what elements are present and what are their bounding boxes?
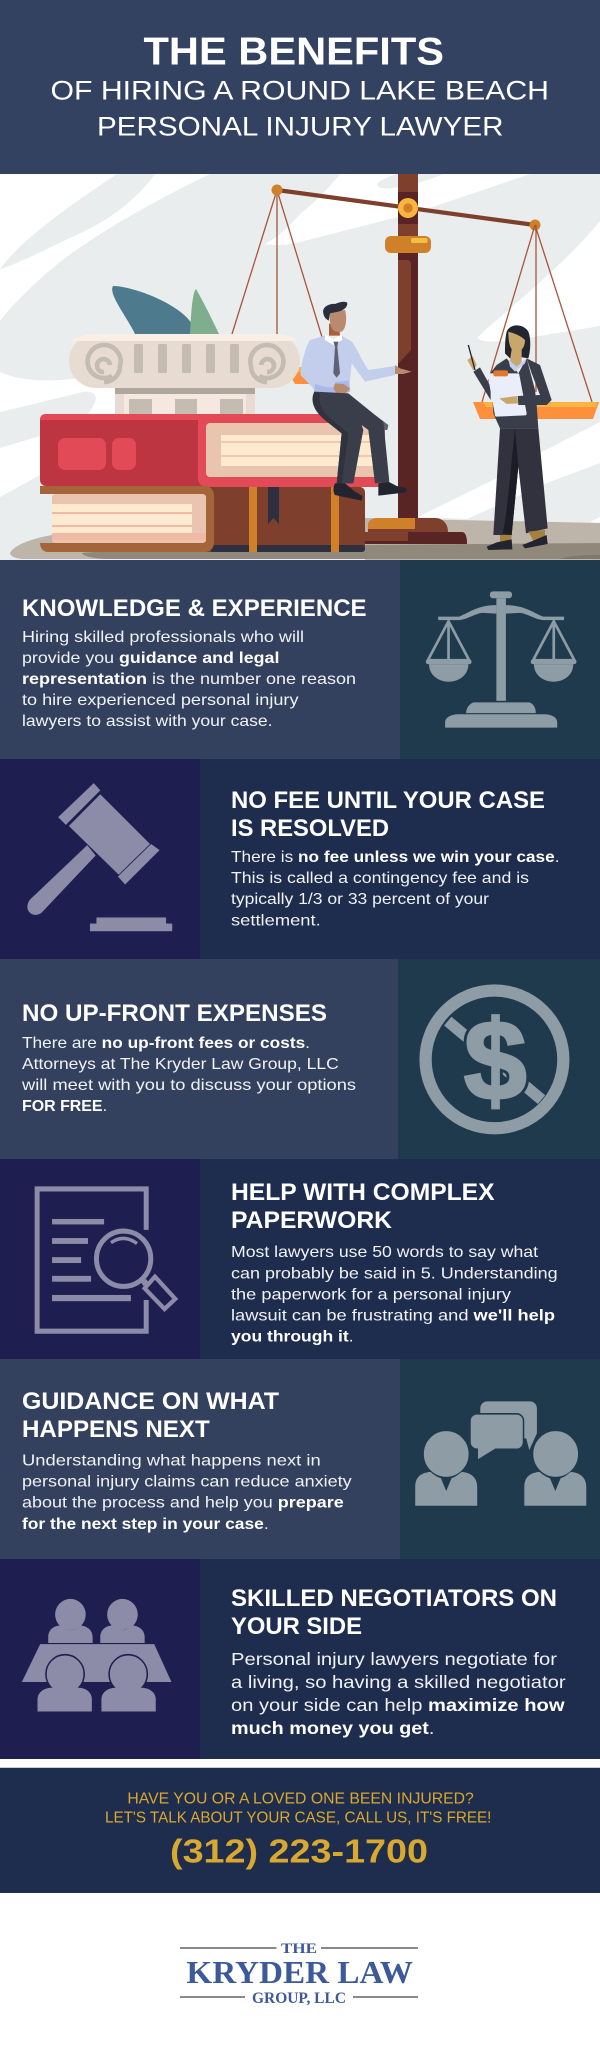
scale ropes right	[482, 225, 592, 402]
body text	[231, 1244, 558, 1346]
logo: The Kryder Law Group, LLC	[180, 1941, 418, 2007]
scale left pan	[285, 367, 320, 384]
body text: can probably be said in 5. Understanding	[231, 1266, 558, 1283]
body text: you through it .	[231, 1329, 354, 1346]
heading: KNOWLEDGE & EXPERIENCE	[22, 595, 367, 622]
panel: guidance on what happens next	[0, 1359, 600, 1559]
heading: PAPERWORK	[231, 1207, 393, 1234]
icon: two people talking	[415, 1401, 586, 1506]
body text: lawsuit can be frustrating and we'll help	[231, 1308, 555, 1325]
body text: about the process and help you prepare	[22, 1495, 344, 1512]
title: THE BENEFITS	[144, 31, 444, 74]
header banner	[0, 0, 600, 174]
body text: settlement.	[231, 912, 321, 930]
body text: much money you get .	[231, 1718, 434, 1738]
body text	[231, 849, 560, 930]
scale right pan	[473, 402, 599, 419]
heading	[231, 787, 545, 842]
brown book	[40, 486, 365, 552]
beam pivots	[272, 184, 540, 230]
body text	[22, 629, 356, 730]
heading: NO UP-FRONT EXPENSES	[22, 1000, 327, 1027]
body text: Hiring skilled professionals who will	[22, 629, 304, 646]
body text	[231, 1649, 566, 1738]
red book	[40, 414, 385, 487]
title: OF HIRING A ROUND LAKE BEACH	[50, 76, 549, 106]
heading: HELP WITH COMPLEX	[231, 1179, 494, 1206]
call to action banner	[0, 1768, 600, 1893]
icon: people at negotiating table	[22, 1599, 171, 1712]
icon: crossed-out dollar sign	[426, 991, 563, 1128]
body text: provide you guidance and legal	[22, 650, 279, 667]
heading	[22, 1388, 279, 1443]
heading: YOUR SIDE	[231, 1613, 362, 1640]
title: PERSONAL INJURY LAWYER	[97, 112, 504, 142]
phone number: (312) 223-1700	[170, 1832, 428, 1870]
body text: on your side can help maximize how	[231, 1695, 565, 1715]
body text: There is no fee unless we win your case .	[231, 849, 560, 866]
ground shadow	[10, 518, 600, 560]
body text: FOR FREE.	[22, 1098, 107, 1115]
body text: typically 1/3 or 33 percent of your	[231, 891, 490, 908]
body text: There are no up-front fees or costs .	[22, 1035, 310, 1052]
body text: Personal injury lawyers negotiate for	[231, 1649, 557, 1669]
post clamp	[385, 236, 431, 253]
body text: will meet with you to discuss your options	[21, 1077, 356, 1094]
panel: no up-front expenses	[0, 959, 600, 1159]
body text: Understanding what happens next in	[22, 1453, 321, 1470]
logo: The Kryder Law Group, LLC: THE	[281, 1941, 317, 1957]
heading: IS RESOLVED	[231, 815, 389, 842]
scale base	[365, 518, 467, 544]
body text: the paperwork for a personal injury	[231, 1287, 511, 1304]
icon: gavel	[27, 783, 172, 931]
icon: document with magnifying glass	[37, 1189, 175, 1331]
man sitting	[301, 302, 412, 501]
heading: NO FEE UNTIL YOUR CASE	[231, 787, 545, 814]
title	[50, 31, 549, 142]
body text: lawyers to assist with your case.	[22, 713, 272, 730]
panel: skilled negotiators	[0, 1559, 600, 1759]
call to action text	[105, 1790, 491, 1827]
icon: crossed-out dollar sign: $	[464, 998, 527, 1124]
body text: for the next step in your case .	[22, 1516, 269, 1533]
body text: a living, so having a skilled negotiator	[231, 1672, 566, 1692]
scale post	[398, 174, 418, 519]
call to action text: HAVE YOU OR A LOVED ONE BEEN INJURED?	[127, 1790, 474, 1808]
panel: no fee until case resolved	[0, 759, 600, 959]
call to action text: LET'S TALK ABOUT YOUR CASE, CALL US, IT'S FREE!	[105, 1810, 491, 1827]
panel: help with complex paperwork	[0, 1159, 600, 1359]
woman standing with clipboard	[467, 325, 552, 550]
heading: SKILLED NEGOTIATORS ON	[231, 1585, 557, 1612]
logo: The Kryder Law Group, LLC: KRYDER LAW	[186, 1954, 413, 1990]
body text: personal injury claims can reduce anxiety	[22, 1474, 352, 1491]
greek column capital	[69, 334, 300, 414]
body text: to hire experienced personal injury	[22, 692, 298, 709]
panel: knowledge and experience	[0, 560, 600, 759]
hero illustration: scales of justice, books, lawyers	[0, 174, 600, 560]
heading: GUIDANCE ON WHAT	[22, 1388, 279, 1415]
body text: Attorneys at The Kryder Law Group, LLC	[22, 1056, 339, 1073]
scale beam	[277, 190, 535, 225]
logo: The Kryder Law Group, LLC: GROUP, LLC	[252, 1990, 346, 2007]
icon: scales of justice	[426, 591, 576, 728]
body text: representation is the number one reason	[22, 671, 356, 688]
body text: This is called a contingency fee and is	[231, 870, 529, 887]
body text: Most lawyers use 50 words to say what	[231, 1244, 539, 1261]
leaves	[112, 286, 219, 334]
heading	[231, 1585, 557, 1640]
heading: HAPPENS NEXT	[22, 1416, 210, 1443]
heading	[231, 1179, 494, 1234]
body text	[21, 1035, 356, 1115]
icon: crossed-out dollar sign: $	[464, 998, 527, 1124]
scale ropes left	[232, 190, 322, 337]
body text	[22, 1453, 352, 1533]
